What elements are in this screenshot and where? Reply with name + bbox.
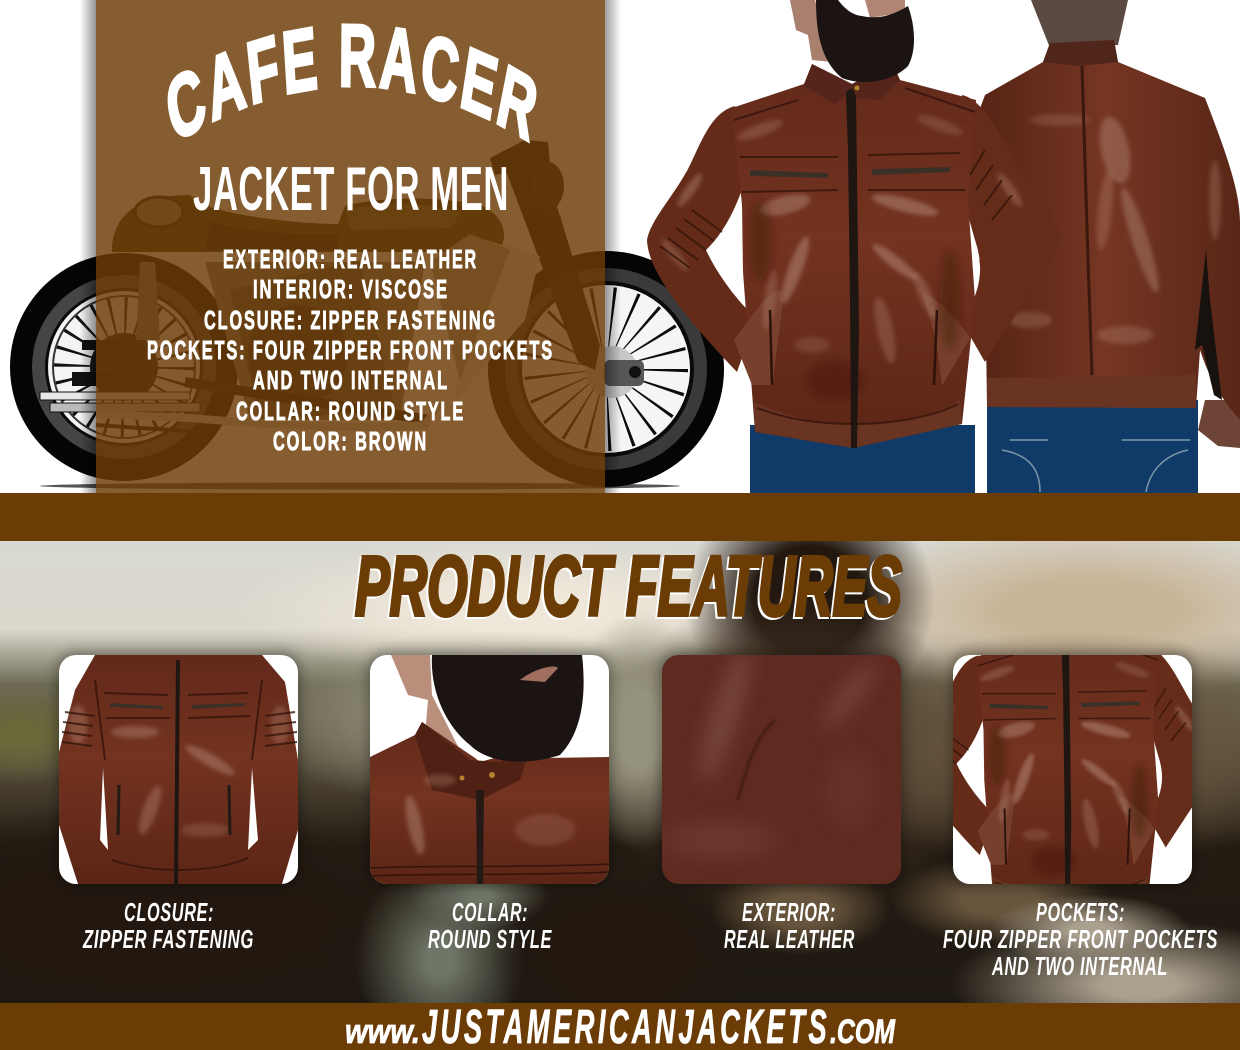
- beard: [432, 655, 584, 762]
- jacket zoomed view: [953, 655, 1192, 884]
- fork and handlebars: [506, 167, 600, 370]
- illustration: cafe racer motorcycle: [10, 140, 724, 490]
- model photo: back view of jacket: [972, 0, 1240, 493]
- heading: cafe racer: CAFE RACER: [168, 23, 536, 144]
- rear wheel: [10, 253, 238, 481]
- panel background: [96, 0, 605, 493]
- bike body and tank: [96, 140, 600, 432]
- blurred outdoor background: [0, 541, 1240, 1003]
- ground shadow under bike: [40, 482, 680, 490]
- front wheel: [488, 251, 724, 487]
- captions: [82, 897, 1218, 981]
- brown divider band: [0, 493, 1240, 541]
- white header background: [0, 0, 1240, 493]
- panel: product summary: [96, 0, 605, 493]
- heading: jacket for men: JACKET FOR MEN: [193, 155, 509, 224]
- panel shadow, left side: [80, 0, 96, 493]
- specification list: [147, 244, 554, 456]
- section heading: product features: [353, 539, 902, 635]
- caption: closure: ZIPPER FASTENING: [82, 924, 254, 954]
- caption: exterior: REAL LEATHER: [724, 924, 855, 954]
- footer website address: [345, 1001, 895, 1050]
- footer band: [0, 1003, 1240, 1050]
- model photo: front view of jacket: [647, 0, 1061, 493]
- caption: closure: CLOSURE:: [124, 897, 214, 927]
- specification list: AND TWO INTERNAL: [253, 365, 449, 395]
- specification list: POCKETS: FOUR ZIPPER FRONT POCKETS: [147, 335, 554, 365]
- card: closure photo: [59, 655, 298, 884]
- front view jeans: [750, 425, 975, 493]
- specification list: COLOR: BROWN: [273, 426, 428, 456]
- card: pockets photo: [953, 655, 1192, 884]
- specification list: COLLAR: ROUND STYLE: [236, 396, 465, 426]
- card: collar photo: [370, 655, 609, 884]
- footer website address: www.: [345, 1013, 420, 1050]
- jacket body: [59, 655, 298, 884]
- jacket collar and shoulders: [370, 722, 609, 884]
- caption: collar: COLLAR:: [452, 897, 528, 927]
- caption: exterior: [724, 897, 855, 954]
- caption: collar: ROUND STYLE: [428, 924, 552, 954]
- caption: pockets: [943, 897, 1218, 981]
- caption: pockets: POCKETS:: [1036, 897, 1125, 927]
- specification list: CLOSURE: ZIPPER FASTENING: [204, 305, 497, 335]
- card: leather texture photo: [660, 645, 901, 884]
- dark gap at the front figure's elbow: [978, 259, 980, 266]
- back view head: [1031, 0, 1128, 48]
- neck and ear: [391, 655, 458, 747]
- caption: collar: [428, 897, 552, 954]
- caption: exterior: EXTERIOR:: [742, 897, 836, 927]
- panel shadow, right side: [605, 0, 621, 493]
- back view hand: [1198, 400, 1240, 448]
- section heading: product features: PRODUCT FEATURES: [355, 539, 902, 633]
- footer website address: .COM: [830, 1013, 895, 1050]
- section heading: product features: PRODUCT FEATURES: [353, 541, 900, 635]
- front view head, ear and beard: [790, 0, 914, 82]
- caption: closure: [82, 897, 254, 954]
- specification list: INTERIOR: VISCOSE: [253, 274, 449, 304]
- back jacket: [972, 40, 1240, 420]
- back view jeans: [987, 400, 1198, 493]
- card shadows: [57, 652, 1194, 886]
- specification list: EXTERIOR: REAL LEATHER: [223, 244, 478, 274]
